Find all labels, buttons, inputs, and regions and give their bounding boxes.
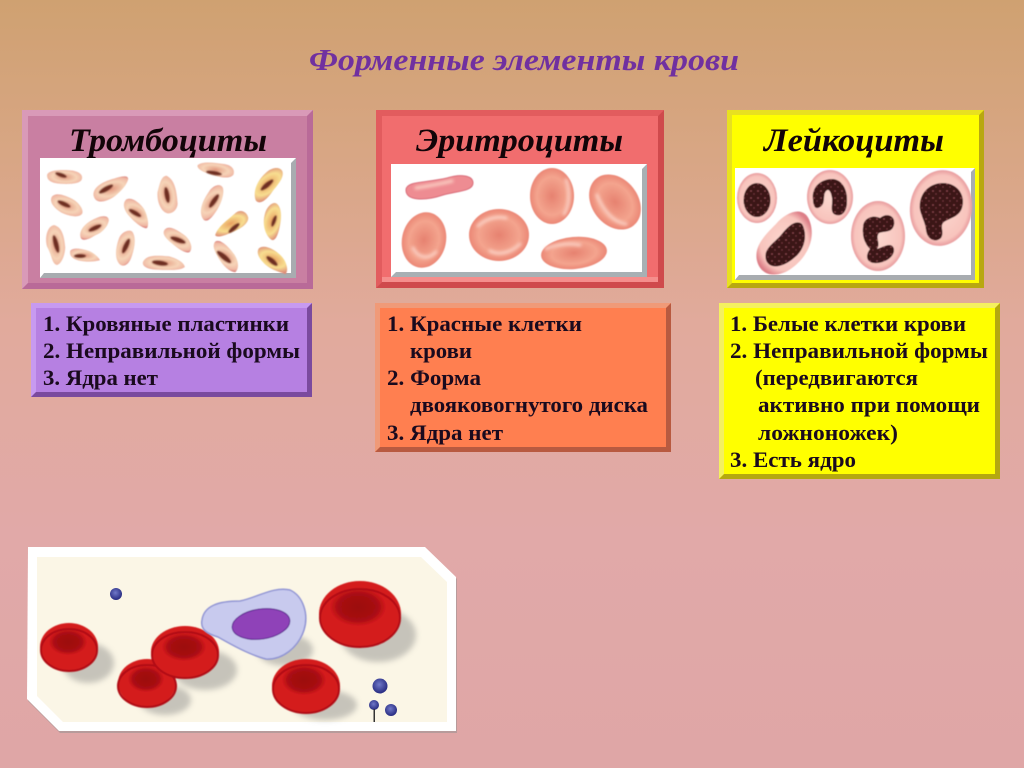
text box: erythrocytes: крови xyxy=(410,338,472,363)
text box: erythrocytes: 1. Красные клетки xyxy=(387,311,582,336)
panel: leukocytes xyxy=(727,110,984,288)
text box: platelets xyxy=(31,303,312,397)
white blood cell xyxy=(202,589,306,659)
text box: erythrocytes: 3. Ядра нет xyxy=(387,420,503,445)
text box: leukocytes: активно при помощи xyxy=(758,392,980,417)
text box: erythrocytes xyxy=(375,303,671,452)
text box: platelets: 2. Неправильной формы xyxy=(43,338,300,363)
illustration: blood cells xyxy=(27,547,457,733)
text box: erythrocytes: двояковогнутого диска xyxy=(410,392,648,417)
text box: leukocytes: ложноножек) xyxy=(758,420,898,445)
text box: platelets: 1. Кровяные пластинки xyxy=(43,311,289,336)
heading: leukocytes: Лейкоциты xyxy=(762,123,944,159)
heading: erythrocytes: Эритроциты xyxy=(416,123,623,159)
text box: leukocytes: 1. Белые клетки крови xyxy=(730,311,966,336)
text box: leukocytes: (передвигаются xyxy=(755,365,918,390)
title: Форменные элементы крови xyxy=(309,42,739,77)
image frame: leukocytes xyxy=(735,166,977,280)
text box: platelets: 3. Ядра нет xyxy=(43,365,158,390)
erythrocyte cells xyxy=(397,164,652,272)
text box: leukocytes xyxy=(719,303,1000,479)
text box: leukocytes: 3. Есть ядро xyxy=(730,447,856,472)
panel: platelets xyxy=(22,110,313,289)
platelets: blue dots xyxy=(110,588,397,722)
text box: erythrocytes: 2. Форма xyxy=(387,365,481,390)
cell shadows xyxy=(62,608,416,720)
leukocyte cells xyxy=(737,166,977,275)
text box: leukocytes: 2. Неправильной формы xyxy=(730,338,988,363)
red blood cells xyxy=(40,581,401,713)
cell highlights xyxy=(413,180,626,257)
panel: erythrocytes xyxy=(376,110,664,288)
image frame: erythrocytes xyxy=(391,164,652,277)
heading: platelets: Тромбоциты xyxy=(69,123,267,159)
image frame: platelets xyxy=(40,158,296,278)
platelet cells xyxy=(45,160,293,274)
